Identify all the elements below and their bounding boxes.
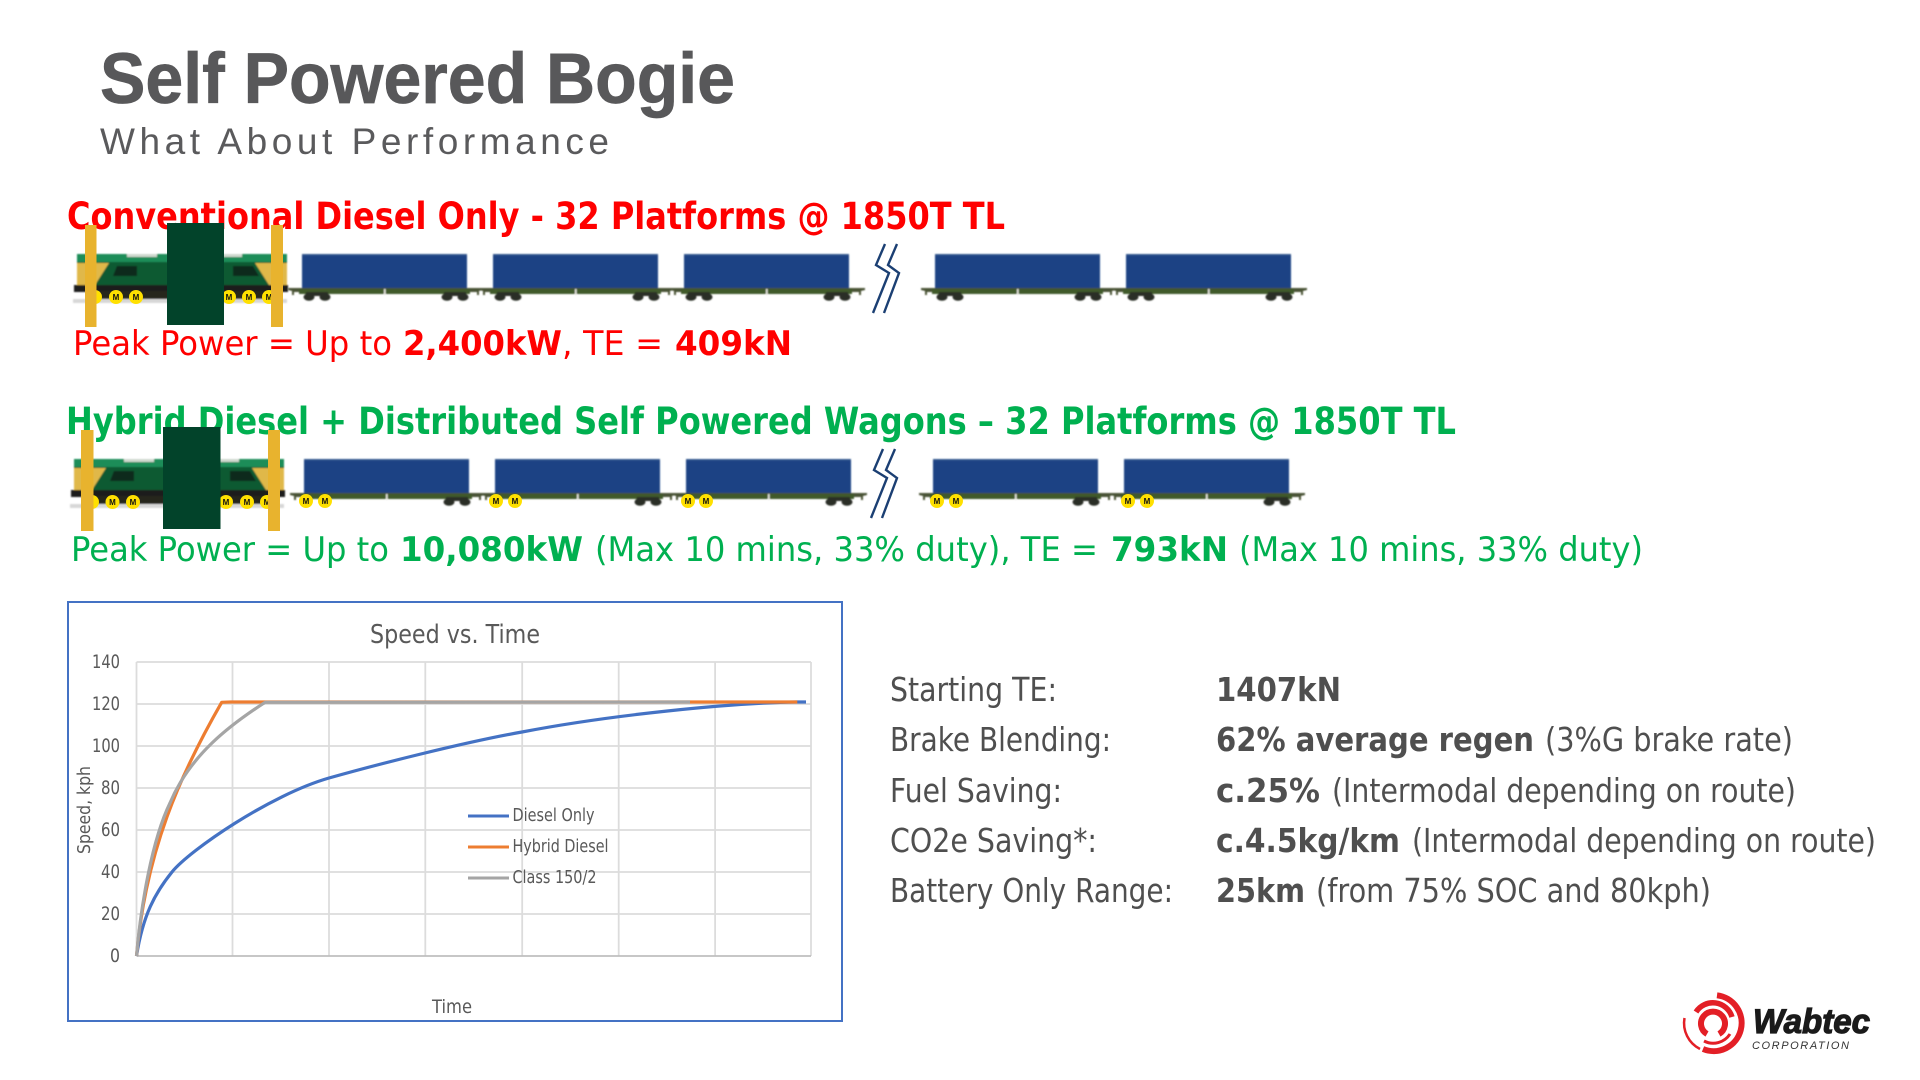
peak power: hybrid: (Max 10 mins, 33% duty), TE = (595, 530, 1098, 570)
fuel saving: (Intermodal depending on route) (1332, 771, 1796, 810)
motor markers: M (1125, 497, 1132, 506)
y axis tick labels: 40 (101, 861, 120, 883)
fuel saving (890, 771, 1796, 810)
starting TE: 1407kN (1216, 670, 1341, 709)
chart title: Speed vs. Time (370, 620, 540, 650)
fuel saving: c.25% (1216, 771, 1320, 810)
y axis tick labels: 100 (92, 735, 120, 757)
peak power: hybrid (71, 530, 1643, 570)
dark green redaction block (167, 223, 224, 325)
logo corporation line: CORPORATION (1752, 1040, 1849, 1052)
peak power: conventional (73, 324, 792, 364)
legend (468, 805, 608, 888)
starting TE: Starting TE: (890, 670, 1057, 709)
brake blending: Brake Blending: (890, 720, 1111, 759)
motor markers: M (493, 497, 500, 506)
peak power: conventional: 2,400kW (403, 324, 562, 364)
brake blending: 62% average regen (1216, 720, 1534, 759)
series: class 150/2 (136, 702, 690, 956)
logo: Wabtec (1684, 995, 1870, 1052)
motor markers: M (246, 293, 253, 302)
wagons (288, 254, 1307, 301)
yellow redaction bar right (268, 430, 280, 531)
motor markers: M (703, 497, 710, 506)
CO2e saving: c.4.5kg/km (1216, 821, 1400, 860)
logo mark (1684, 995, 1742, 1051)
legend: Diesel Only (512, 805, 595, 826)
motor markers: M (934, 497, 941, 506)
motor markers: M (133, 293, 140, 302)
motor markers: M (223, 498, 230, 507)
peak power: hybrid: 10,080kW (400, 530, 583, 570)
motor markers: M (264, 498, 271, 507)
motor markers: M (953, 497, 960, 506)
peak power: conventional: Peak Power = Up to (73, 324, 392, 364)
series: hybrid diesel (136, 702, 797, 956)
legend: Class 150/2 (512, 867, 596, 888)
motor markers (88, 290, 276, 304)
y axis tick labels (92, 651, 120, 967)
y axis tick labels: 60 (101, 819, 120, 841)
locomotive (70, 459, 285, 508)
peak power: hybrid: (Max 10 mins, 33% duty) (1239, 530, 1643, 570)
subtitle: What About Performance (100, 121, 609, 162)
yellow redaction bar left (85, 225, 96, 327)
motor markers: M (512, 497, 519, 506)
brake blending: (3%G brake rate) (1545, 720, 1793, 759)
train: hybrid consist (70, 427, 1305, 531)
locomotive (73, 254, 288, 303)
yellow redaction bar left (81, 430, 94, 531)
peak power: conventional: , TE = (562, 324, 663, 364)
performance stats list (890, 670, 1876, 910)
motor markers: M (130, 498, 137, 507)
x axis label: Time (431, 996, 472, 1018)
fuel saving: Fuel Saving: (890, 771, 1062, 810)
heading: conventional diesel: Conventional Diesel Only - 32 Platforms @ 1850T TL (67, 195, 1005, 238)
break symbol (873, 244, 899, 313)
y axis tick labels: 140 (92, 651, 120, 673)
logo wordmark: Wabtec (1753, 1003, 1870, 1041)
title: Self Powered Bogie (100, 40, 735, 119)
yellow redaction bar right (271, 225, 283, 327)
battery only range: 25km (1216, 871, 1305, 910)
motor markers: M (226, 293, 233, 302)
brake blending (890, 720, 1793, 759)
motor markers: M (109, 498, 116, 507)
peak power: conventional: 409kN (675, 324, 792, 364)
motor markers: M (322, 497, 329, 506)
motor markers: M (244, 498, 251, 507)
train: conventional diesel consist (73, 223, 1307, 327)
y axis tick labels: 20 (101, 903, 120, 925)
peak power: hybrid: Peak Power = Up to (71, 530, 389, 570)
motor markers: M (685, 497, 692, 506)
motor markers: M (303, 497, 310, 506)
break symbol (871, 449, 897, 518)
CO2e saving (890, 821, 1876, 860)
motor markers: M (266, 293, 273, 302)
legend: Hybrid Diesel (512, 836, 608, 857)
CO2e saving: CO2e Saving*: (890, 821, 1097, 860)
series: diesel only (136, 702, 806, 956)
y axis label: Speed, kph (74, 766, 95, 854)
y axis tick labels: 0 (110, 945, 120, 967)
chart frame (68, 602, 842, 1021)
y axis tick labels: 80 (101, 777, 120, 799)
wagons (290, 459, 1305, 506)
peak power: hybrid: 793kN (1111, 530, 1228, 570)
motor markers: M (113, 293, 120, 302)
motor markers (85, 494, 1154, 509)
starting TE (890, 670, 1341, 709)
dark green redaction block (163, 427, 220, 529)
panel: speed vs time chart (68, 602, 842, 1021)
battery only range (890, 871, 1711, 910)
battery only range: Battery Only Range: (890, 871, 1173, 910)
battery only range: (from 75% SOC and 80kph) (1316, 871, 1711, 910)
heading: hybrid diesel: Hybrid Diesel + Distributed Self Powered Wagons – 32 Platforms @ 1850T TL (66, 400, 1456, 443)
motor markers: M (1144, 497, 1151, 506)
y axis tick labels: 120 (92, 693, 120, 715)
